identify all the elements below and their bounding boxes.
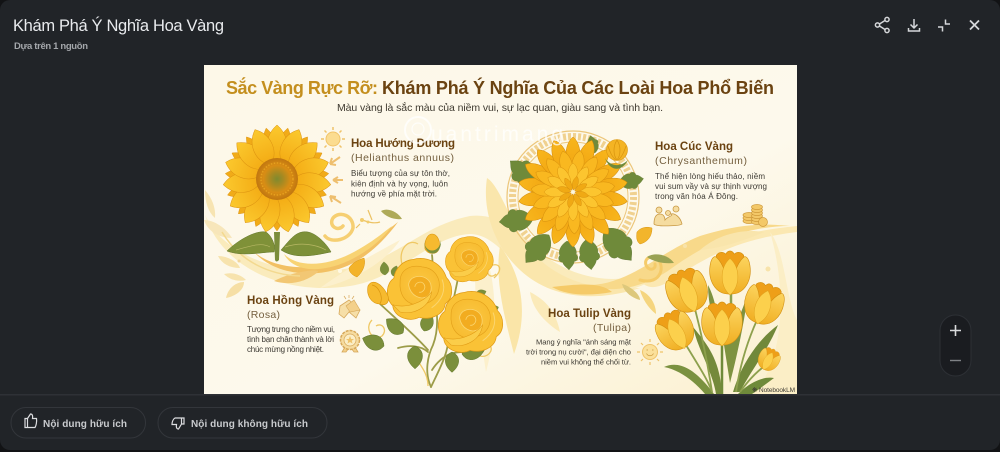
leaves — [498, 134, 645, 271]
icon: coins — [743, 204, 768, 226]
petals — [222, 125, 332, 234]
left spiral — [325, 214, 353, 240]
button: not helpful: Nội dung không hữu ích — [191, 419, 308, 430]
left gold ribbons — [254, 222, 398, 273]
flower: sunflower — [222, 125, 332, 262]
icon: medal — [340, 330, 360, 352]
text: chrysanthemum: vui sum vầy và sự thịnh vượng — [655, 182, 767, 191]
icon: thumbs up — [25, 414, 37, 428]
icon: handshake — [339, 295, 360, 318]
right ribbons — [640, 226, 797, 287]
infographic title: Sắc Vàng Rực Rỡ: — [226, 77, 378, 98]
icon: family — [654, 206, 682, 226]
button: helpful: Nội dung hữu ích — [43, 419, 127, 430]
text: yellow tulip — [526, 308, 632, 366]
text: yellow rose: (Rosa) — [247, 309, 280, 321]
text: chrysanthemum: (Chrysanthemum) — [655, 155, 747, 167]
meander ring — [507, 131, 639, 263]
stem and leaves — [227, 232, 331, 262]
text: yellow tulip: Mang ý nghĩa "ánh sáng mặt — [536, 338, 632, 346]
text: sunflower: Biểu tượng của sự tôn thờ, — [351, 169, 450, 178]
tall pale plume — [486, 178, 640, 296]
rose blooms — [387, 237, 503, 352]
header toolbar icons — [875, 17, 979, 33]
infographic title — [226, 77, 774, 98]
left pale leaves — [204, 220, 232, 238]
text: yellow rose: chúc mừng nồng nhiệt. — [247, 345, 324, 354]
text: yellow rose — [247, 295, 335, 354]
infographic background — [204, 65, 797, 394]
text: yellow rose: Hoa Hồng Vàng — [247, 295, 334, 307]
text: yellow rose: Tượng trưng cho niềm vui, — [247, 325, 335, 334]
text: yellow tulip: Hoa Tulip Vàng — [548, 308, 631, 320]
NotebookLM badge: ❋ NotebookLM — [752, 387, 795, 394]
icon: collapse — [938, 20, 950, 32]
flower: yellow tulips — [650, 251, 789, 394]
header: title and source: Dựa trên 1 nguồn — [14, 41, 88, 52]
leaves — [360, 261, 500, 372]
divider — [0, 394, 1000, 396]
icon: smiling sun — [637, 339, 663, 365]
text: sunflower: Hoa Hướng Dương — [351, 138, 455, 150]
header: title and source — [13, 16, 224, 52]
icon: thumbs down — [172, 418, 184, 429]
icon: download — [908, 19, 920, 31]
rose buds — [349, 234, 441, 305]
main S ribbon — [205, 215, 682, 294]
zoom control — [940, 315, 971, 376]
text: yellow rose: tình bạn chân thành và lời — [247, 335, 334, 344]
text: chrysanthemum: Hoa Cúc Vàng — [655, 141, 733, 153]
icon: minus — [950, 360, 961, 362]
text: sunflower: (Helianthus annuus) — [351, 152, 454, 164]
panel: infographic — [204, 65, 797, 394]
infographic title: Khám Phá Ý Nghĩa Của Các Loài Hoa Phổ Biến — [382, 77, 774, 98]
text: chrysanthemum: Thể hiện lòng hiếu thảo, niềm — [655, 172, 765, 181]
icon: sun with arrows — [321, 127, 345, 203]
text: sunflower: hướng về phía mặt trời. — [351, 190, 437, 198]
watermark: Quantrimang — [405, 117, 563, 146]
icon: close — [970, 20, 979, 30]
text: sunflower — [351, 138, 455, 198]
text: yellow tulip: niềm vui không thể chối từ. — [541, 358, 631, 366]
subtitle: Màu vàng là sắc màu của niềm vui, sự lạc quan, giàu sang và tình bạn. — [337, 101, 663, 114]
decorative golden swirls — [204, 178, 797, 394]
header: title and source: Khám Phá Ý Nghĩa Hoa Vàng — [13, 16, 224, 35]
text: chrysanthemum: trong văn hóa Á Đông. — [655, 192, 738, 201]
flower: yellow roses — [349, 234, 503, 387]
curls — [369, 242, 500, 386]
button: not helpful — [158, 408, 327, 438]
text: yellow tulip: trời trong nụ cười", đại diện cho — [526, 348, 631, 356]
petals — [518, 137, 628, 247]
stems and leaves — [664, 285, 778, 394]
text: yellow tulip: (Tulipa) — [593, 322, 631, 334]
flower: chrysanthemum — [498, 131, 652, 271]
icon: share — [875, 17, 889, 33]
text: sunflower: kiên định và hy vọng, luôn — [351, 180, 448, 188]
button: helpful — [11, 408, 146, 438]
bud — [605, 140, 652, 244]
icon: plus — [950, 325, 961, 336]
text: chrysanthemum — [655, 141, 767, 201]
right swirl — [640, 257, 661, 281]
tulip blooms — [650, 251, 789, 375]
stems — [378, 255, 468, 387]
watermark: Quantrimang: uantrimang — [431, 123, 563, 146]
